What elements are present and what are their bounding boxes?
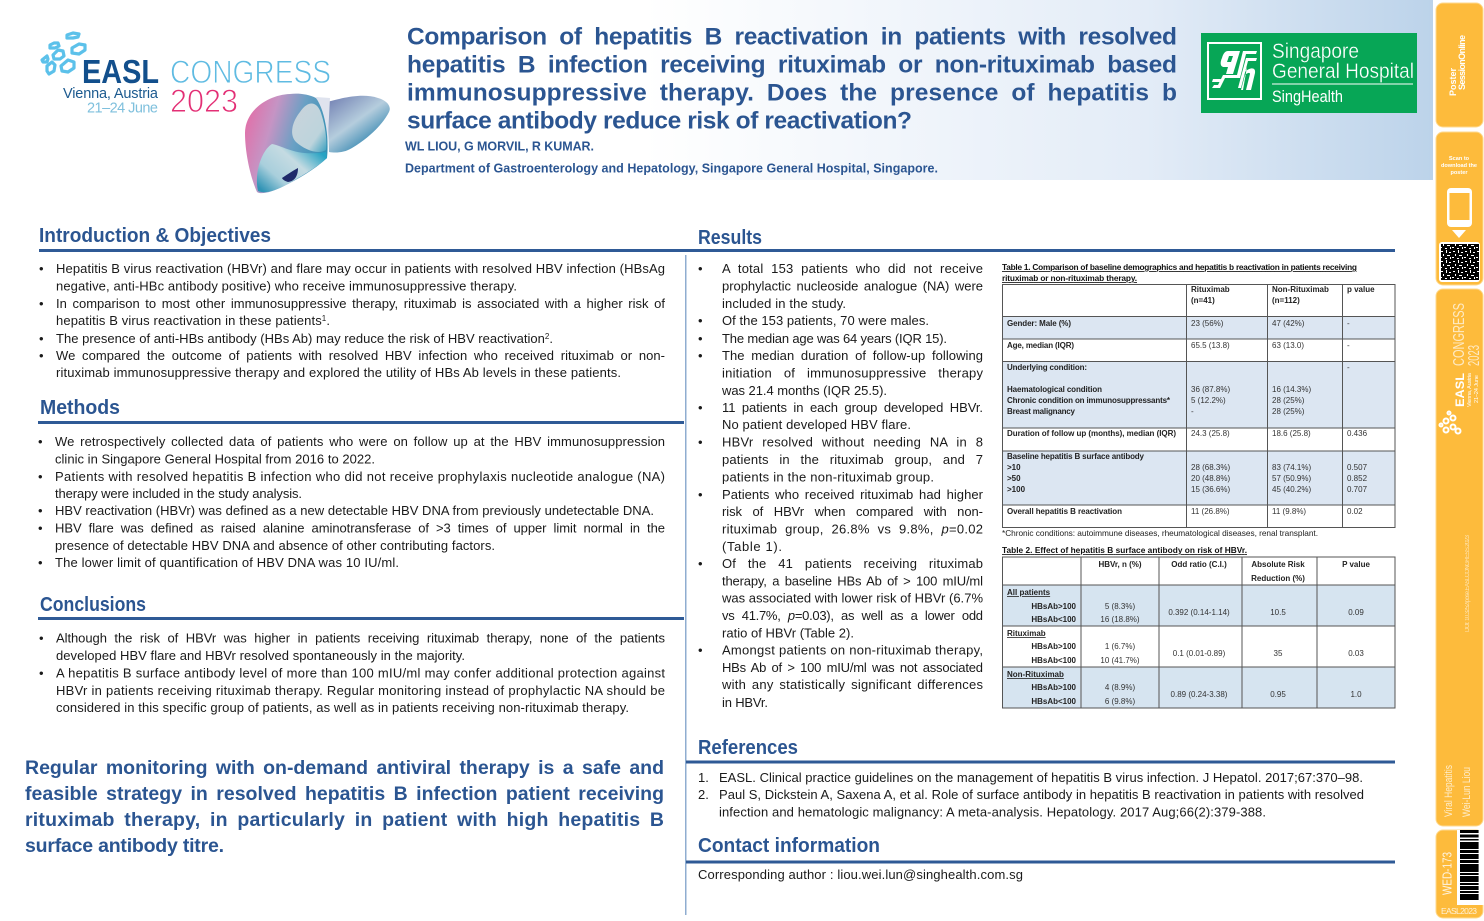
table 1 row labels: Baseline hepatitis B surface antibody	[1007, 452, 1145, 461]
panel: congress identity: 21–24 June	[1474, 375, 1480, 403]
bullet list: therapy were included in the study analysis.	[55, 486, 302, 501]
contact line: Corresponding author : liou.wei.lun@singhealth.com.sg	[698, 867, 1023, 882]
panel: poster session online	[1436, 3, 1483, 127]
bullet list: HBV flare was defined as raised alanine aminotransferase of >3 times of upper limit normal in the	[55, 520, 665, 536]
icon: phone	[1447, 188, 1472, 238]
bullet list: A hepatitis B surface antibody level of more than 100 mIU/ml may confer additional protection against	[56, 666, 665, 680]
table 2 values: 0.392 (0.14-1.14)	[1168, 608, 1230, 617]
table 2: effect of surface antibody	[1002, 545, 1395, 708]
table 1 non-rituximab column: 63 (13.0)	[1272, 341, 1304, 350]
results bullet list: •	[698, 642, 703, 658]
bullet list: •	[39, 296, 44, 311]
table 1 p values: 0.436	[1347, 429, 1368, 438]
table 2 groups: HBsAb<100	[1031, 656, 1077, 665]
table 1 p values: 0.507	[1347, 463, 1368, 472]
table 1 rituximab column: 15 (36.6%)	[1191, 485, 1230, 494]
bullet list: We compared the outcome of patients with resolved HBV infection who received rituximab or non-	[56, 348, 665, 363]
panel: conclusions	[38, 594, 684, 715]
bullet list: •	[38, 503, 43, 518]
table 1 non-rituximab column: 83 (74.1%)	[1272, 463, 1311, 472]
table 1 non-rituximab column: 45 (40.2%)	[1272, 485, 1311, 494]
results bullet list: rituximab group, 26.8% vs 9.8%, p=0.02	[722, 522, 983, 536]
table 1 non-rituximab column	[1272, 319, 1311, 516]
reference list: Paul S, Dickstein A, Saxena A, et al. Role of surface antibody in hepatitis B reactivation in patients with resolved	[719, 787, 1364, 802]
table 1 rituximab column: 23 (56%)	[1191, 319, 1224, 328]
callout: take-home message: rituximab therapy, in particularly in patient with high hepatitis B	[25, 809, 664, 831]
panel: poster session online: Poster	[1448, 68, 1458, 96]
table 1 rituximab column: 11 (26.8%)	[1191, 507, 1230, 516]
table 1 row labels: >100	[1007, 485, 1026, 494]
table 2 values: 0.89 (0.24-3.38)	[1171, 690, 1228, 699]
results bullet list: was 21.4 months (IQR 25.5).	[721, 383, 887, 398]
title	[407, 24, 1177, 134]
title: hepatitis B infection receiving rituximab or non-rituximab based	[407, 52, 1177, 78]
panel: contact information	[686, 835, 1395, 882]
panel: scan QR: poster	[1450, 170, 1468, 176]
table 1 p values: 0.852	[1347, 474, 1368, 483]
logo: Singapore General Hospital: General Hospital	[1272, 60, 1414, 83]
results bullet list: Of the 41 patients receiving rituximab	[722, 556, 983, 571]
panel: poster number	[1436, 830, 1484, 918]
panel: congress identity: DOI: 10.3252/pose.EASLCONGRESS.2023	[1465, 534, 1471, 632]
results bullet list: •	[698, 434, 703, 450]
bullet list: HBV reactivation (HBVr) was defined as a new detectable HBV DNA from previously undetectable DNA.	[55, 503, 654, 518]
table 1 row labels: >10	[1007, 463, 1021, 472]
panel: results	[698, 227, 1395, 710]
panel: congress identity: Vienna, Austria	[1467, 372, 1473, 407]
table 2 values: 1 (6.7%)	[1105, 642, 1135, 651]
bullet list: •	[38, 555, 43, 570]
results bullet list: No patient developed HBV flare.	[722, 417, 911, 432]
bullet list: Although the risk of HBVr was higher in patients receiving rituximab therapy, none of the patients	[56, 630, 666, 646]
table 1 header: (n=112)	[1272, 296, 1300, 305]
table 2 groups: Rituximab	[1007, 629, 1046, 638]
table 2 values	[1100, 602, 1364, 706]
table 1 header: Non-Rituximab	[1272, 285, 1329, 294]
results bullet list: •	[698, 348, 703, 363]
bullet list: rituximab immunosuppressive therapy and explored the utility of HBs Ab levels in these patients.	[56, 365, 621, 380]
results bullet list: •	[698, 487, 703, 502]
results bullet list: •	[698, 313, 703, 328]
panel: congress identity: CONGRESS	[1451, 303, 1468, 366]
results bullet list: The median age was 64 years (IQR 15).	[722, 331, 947, 346]
table 1 row labels: Chronic condition on immunosuppressants*	[1007, 396, 1171, 405]
bullet list: .	[326, 313, 330, 328]
affiliation: Department of Gastroenterology and Hepatology, Singapore General Hospital, Singapore.	[405, 162, 938, 176]
panel: congress identity: Wei-Lun Liou	[1461, 767, 1473, 817]
table 2 header	[1098, 560, 1370, 583]
heading: Methods	[40, 397, 120, 419]
table 1 rituximab column	[1191, 319, 1230, 516]
table 2 values: 6 (9.8%)	[1105, 697, 1135, 706]
results bullet list: risk of HBVr when compared with non-	[722, 504, 983, 519]
group name: SingHealth	[1272, 88, 1343, 106]
table 1 row labels: Underlying condition:	[1007, 363, 1087, 372]
bullet list: presence of detectable HBV DNA and absence of other contributing factors.	[55, 538, 495, 553]
logo: EASL Congress 2023	[42, 33, 331, 119]
table 2 header: HBVr, n (%)	[1098, 560, 1142, 569]
bullet list: .	[549, 331, 553, 346]
bullet list: •	[39, 348, 44, 363]
table 1 non-rituximab column: 28 (25%)	[1272, 407, 1305, 416]
results bullet list: included in the study.	[722, 296, 846, 311]
table 2 values: 0.09	[1348, 608, 1364, 617]
table 2 header: Absolute Risk	[1251, 560, 1305, 569]
location: Vienna, Austria	[63, 86, 159, 102]
table 1 p values: -	[1347, 363, 1350, 372]
table 1 non-rituximab column: 16 (14.3%)	[1272, 385, 1311, 394]
heading: Conclusions	[40, 594, 146, 616]
title: surface antibody reduce risk of reactivation?	[407, 108, 912, 134]
icon: SGH emblem	[1208, 43, 1261, 99]
header banner background	[0, 0, 1433, 180]
table 2 values: 10 (41.7%)	[1100, 656, 1140, 665]
table 1 rituximab column: -	[1191, 407, 1194, 416]
table 2 header: Reduction (%)	[1251, 574, 1305, 583]
panel: poster number: WED-173	[1440, 852, 1454, 895]
callout: take-home message: feasible strategy in resolved hepatitis B infection patient receiving	[25, 783, 664, 805]
table 2 values: 16 (18.8%)	[1100, 615, 1140, 624]
results bullet list: •	[698, 400, 703, 415]
table 1 header: (n=41)	[1191, 296, 1215, 305]
table 1 row labels: Haematological condition	[1007, 385, 1102, 394]
table 1 rituximab column: 24.3 (25.8)	[1191, 429, 1230, 438]
panel: scan QR	[1436, 132, 1483, 285]
panel: introduction and objectives	[39, 225, 1395, 380]
icon: hexagons	[1440, 412, 1460, 434]
table 2 values: 1.0	[1350, 690, 1362, 699]
results bullet list: (Table 1).	[722, 539, 782, 554]
icon: liver illustration	[245, 94, 390, 193]
results bullet list: HBVr resolved without needing NA in 8	[722, 434, 983, 450]
results bullet list	[698, 261, 984, 710]
results bullet list: Amongst patients on non-rituximab therapy,	[722, 642, 983, 658]
bullet list: In comparison to most other immunosuppressive therapy, rituximab is associated with a higher risk of	[56, 296, 665, 311]
dates: 21–24 June	[87, 100, 158, 116]
heading: Introduction & Objectives	[39, 225, 271, 247]
results bullet list: therapy, a baseline HBs Ab of > 100 mIU/ml	[722, 574, 983, 588]
reference list: 1.	[698, 770, 709, 785]
table 1 non-rituximab column: 11 (9.8%)	[1272, 507, 1306, 516]
panel: methods	[38, 397, 684, 570]
table 2 groups: All patients	[1007, 588, 1051, 597]
table 2 header: Odd ratio (C.I.)	[1171, 560, 1227, 569]
wordmark EASL: EASL	[82, 53, 159, 90]
sidebar	[1436, 3, 1484, 918]
results bullet list: •	[698, 261, 703, 276]
bullet list: •	[39, 630, 44, 646]
table 2 caption: Table 2. Effect of hepatitis B surface antibody on risk of HBVr.	[1002, 545, 1247, 555]
results bullet list: vs 41.7%, p=0.03), as well as a lower odd	[722, 608, 983, 623]
bullet list: •	[39, 666, 44, 680]
table 2 groups: HBsAb<100	[1031, 615, 1077, 624]
title: immunosuppressive therapy. Does the presence of hepatitis b	[407, 80, 1177, 106]
results bullet list: 11 patients in each group developed HBVr.	[722, 400, 983, 415]
callout: take-home message	[25, 757, 664, 857]
bullet list: •	[39, 331, 44, 346]
results bullet list: was associated with lower risk of HBVr (6.7%	[721, 590, 983, 606]
panel: congress identity: Viral Hepatitis	[1443, 765, 1455, 817]
table 1 header	[1191, 285, 1375, 305]
bullet list: hepatitis B virus reactivation in these patients	[56, 313, 322, 328]
table 1 p values	[1347, 319, 1368, 516]
callout: take-home message: Regular monitoring with on-demand antiviral therapy is a safe and	[25, 757, 664, 779]
results bullet list: The median duration of follow-up following	[722, 348, 983, 363]
heading: Contact information	[698, 835, 880, 857]
results bullet list: initiation of immunosuppressive therapy	[722, 366, 984, 380]
title: Comparison of hepatitis B reactivation in patients with resolved	[407, 24, 1177, 50]
bullet list: •	[38, 469, 43, 484]
table 2 values: 4 (8.9%)	[1105, 683, 1135, 692]
QR code	[1439, 242, 1480, 282]
bullet list: We retrospectively collected data of patients who were on follow up at the HBV immunosuppression	[55, 434, 665, 449]
bullet list	[39, 261, 665, 380]
table 1 row labels: Breast malignancy	[1007, 407, 1076, 416]
table 2 groups: HBsAb>100	[1031, 642, 1077, 651]
results bullet list: •	[698, 556, 703, 571]
table 2 groups: Non-Rituximab	[1007, 670, 1064, 679]
table 1 row labels: >50	[1007, 474, 1021, 483]
panel: congress identity	[1436, 289, 1483, 826]
results bullet list: Of the 153 patients, 70 were males.	[722, 313, 929, 328]
table 1 row labels: Age, median (IQR)	[1007, 341, 1074, 350]
table 1: baseline demographics	[1002, 262, 1395, 538]
bullet list: clinic in Singapore General Hospital from 2016 to 2022.	[55, 452, 375, 466]
table 1 non-rituximab column: 18.6 (25.8)	[1272, 429, 1311, 438]
table 1 p values: -	[1347, 319, 1350, 328]
table 1 non-rituximab column: 47 (42%)	[1272, 319, 1305, 328]
table 1 rituximab column: 5 (12.2%)	[1191, 396, 1226, 405]
table 2 values: 0.1 (0.01-0.89)	[1173, 649, 1226, 658]
table 2 values: 5 (8.3%)	[1105, 602, 1135, 611]
table 2 values: 0.95	[1270, 690, 1286, 699]
column divider	[685, 255, 686, 915]
table 1 caption	[1002, 262, 1357, 283]
table 2 header: P value	[1342, 560, 1370, 569]
table 1 non-rituximab column: 57 (50.9%)	[1272, 474, 1311, 483]
bullet list: The lower limit of quantification of HBV DNA was 10 IU/ml.	[55, 555, 399, 570]
table 1 p values: -	[1347, 341, 1350, 350]
panel: scan QR: Scan to	[1449, 156, 1470, 162]
table 1 header: Rituximab	[1191, 285, 1230, 294]
panel: references	[686, 737, 1395, 820]
panel: poster number: EASL2023	[1441, 906, 1477, 916]
table 2 values: 10.5	[1270, 608, 1286, 617]
bullet list: 1	[322, 314, 327, 323]
table 2 values: 35	[1274, 649, 1283, 658]
results bullet list: patients in the non-rituximab group.	[722, 470, 934, 484]
reference list: EASL. Clinical practice guidelines on the management of hepatitis B virus infection. J Hepatol. 2017;67:370–98.	[719, 770, 1363, 785]
table 2 groups	[1007, 588, 1077, 706]
bullet list: •	[39, 261, 44, 276]
bullet list: The presence of anti-HBs antibody (HBs Ab) may reduce the risk of HBV reactivation	[56, 331, 545, 346]
bullet list: developed HBV flare and HBVr resolved spontaneously in the majority.	[56, 648, 465, 663]
table 2 groups: HBsAb>100	[1031, 683, 1077, 692]
results bullet list: in HBVr.	[722, 695, 768, 710]
panel: scan QR: download the	[1441, 163, 1477, 169]
hospital name: Singapore	[1272, 40, 1359, 63]
logo: Singapore General Hospital	[1201, 33, 1417, 113]
reference list: 2.	[698, 787, 709, 802]
bullet list	[39, 630, 666, 715]
congress word: CONGRESS	[170, 54, 331, 90]
table 1 p values: 0.02	[1347, 507, 1363, 516]
table 1 caption: rituximab or non-rituximab therapy.	[1002, 273, 1137, 283]
bullet list: negative, anti-HBc antibody positive) who receive immunosuppressive therapy.	[56, 278, 517, 294]
table 2 groups: HBsAb>100	[1031, 602, 1077, 611]
barcode	[1460, 830, 1479, 900]
table 1 rituximab column: 65.5 (13.8)	[1191, 341, 1230, 350]
table 1 row labels: Duration of follow up (months), median (IQR)	[1007, 429, 1176, 438]
authors: WL LIOU, G MORVIL, R KUMAR.	[405, 140, 594, 154]
table 1 p values: 0.707	[1347, 485, 1368, 494]
reference list	[698, 770, 1364, 820]
bullet list: Hepatitis B virus reactivation (HBVr) and flare may occur in patients with resolved HBV infection (HBsAg	[56, 261, 665, 276]
bullet list: •	[38, 520, 43, 536]
results bullet list: •	[698, 331, 703, 346]
table 1 non-rituximab column: 28 (25%)	[1272, 396, 1305, 405]
results bullet list: ratio of HBVr (Table 2).	[722, 626, 854, 640]
table 1 row labels	[1007, 319, 1176, 516]
results bullet list: patients in the rituximab group, and 7	[722, 452, 983, 467]
year 2023: 2023	[170, 83, 238, 119]
results bullet list: HBs Ab of > 100 mIU/ml was not associated	[722, 660, 983, 675]
table 1 rituximab column: 20 (48.8%)	[1191, 474, 1230, 483]
table 1 rituximab column: 28 (68.3%)	[1191, 463, 1230, 472]
reference list: infection and hematologic malignancy: A meta-analysis. Hepatology. 2017 Aug;66(2):379-388.	[719, 804, 1266, 820]
results bullet list: A total 153 patients who did not receive	[722, 261, 983, 276]
table 1 caption: Table 1. Comparison of baseline demographics and hepatitis b reactivation in patients receiving	[1002, 262, 1357, 272]
bullet list: HBVr in patients receiving rituximab therapy. Regular monitoring instead of prophylactic NA should be	[56, 683, 665, 698]
results bullet list: with any statistically significant differences	[721, 677, 984, 692]
table 1 footnote: *Chronic conditions: autoimmune diseases, rheumatological diseases, renal transplant.	[1002, 528, 1318, 538]
bullet list: •	[38, 434, 43, 449]
callout: take-home message: surface antibody titre.	[25, 835, 224, 857]
icon: EASL hexagon cluster	[42, 33, 85, 74]
table 1 row labels: Overall hepatitis B reactivation	[1007, 507, 1122, 516]
results bullet list: Patients who received rituximab had higher	[722, 487, 984, 502]
panel: congress identity: EASL	[1453, 373, 1467, 407]
bullet list: 2	[545, 332, 550, 341]
table 2 groups: HBsAb<100	[1031, 697, 1077, 706]
heading: References	[698, 737, 798, 759]
results bullet list: prophylactic nucleoside analogue (NA) were	[722, 278, 983, 294]
bullet list	[38, 434, 665, 570]
table 1 rituximab column: 36 (87.8%)	[1191, 385, 1230, 394]
heading: Results	[698, 227, 762, 249]
table 1 row labels: Gender: Male (%)	[1007, 319, 1071, 328]
table 2 values: 0.03	[1348, 649, 1364, 658]
panel: poster session online: SessionOnline	[1457, 35, 1467, 90]
bullet list: Patients with resolved hepatitis B infection who did not receive prophylaxis nucleotide analogue (NA)	[55, 469, 665, 484]
table 1 header: p value	[1347, 285, 1375, 294]
bullet list: considered in this specific group of patients, as well as in patients receiving non-rituximab therapy.	[56, 700, 629, 715]
panel: congress identity: 2023	[1466, 345, 1483, 366]
